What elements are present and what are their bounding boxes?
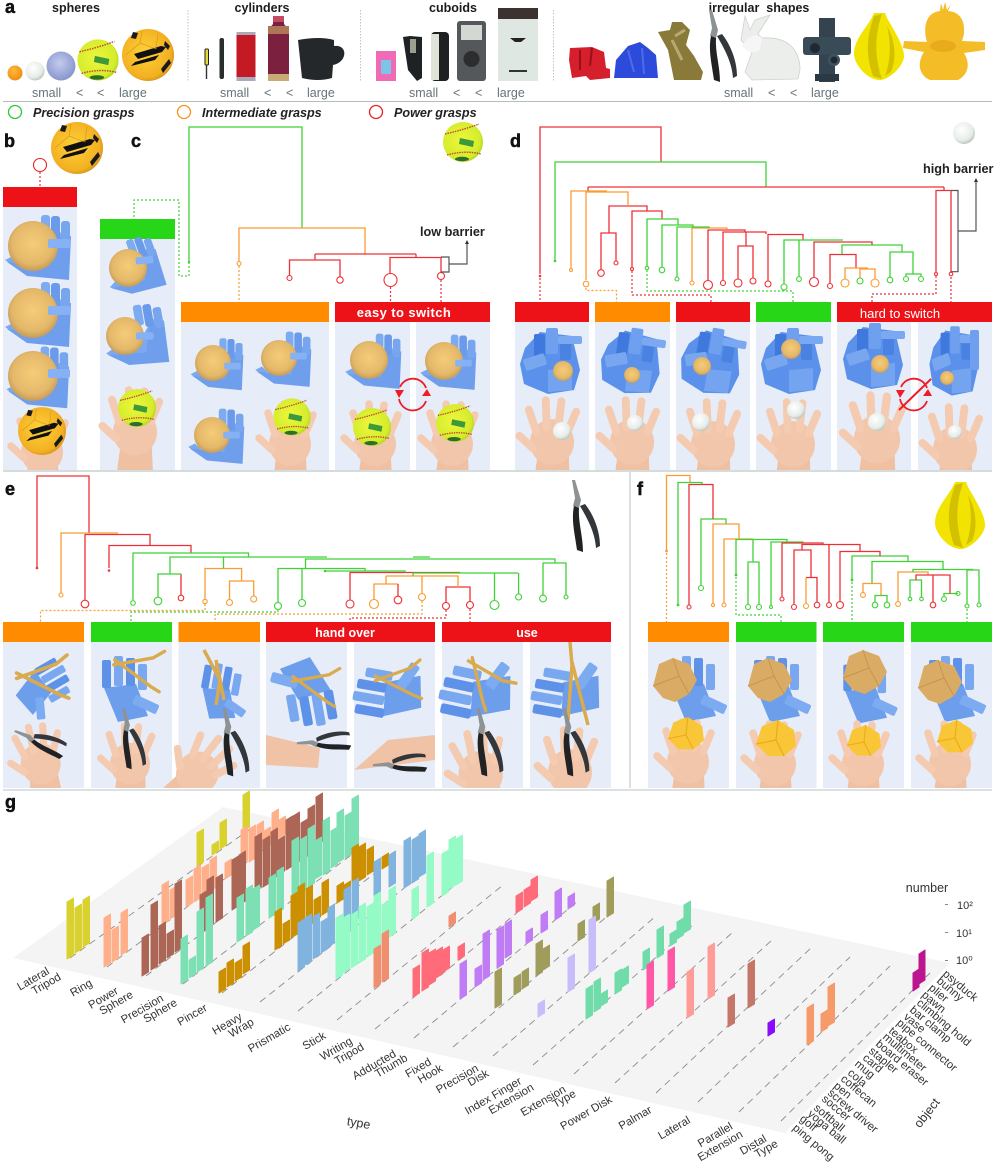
panel letter b: b [4, 131, 15, 151]
bars: Fixed Hook [495, 877, 614, 1008]
number axis: 10¹ [956, 928, 972, 940]
type axis labels: Extension [487, 1082, 536, 1117]
row guide lines [70, 829, 930, 1121]
size labels: large [811, 86, 839, 100]
header bar: green [100, 219, 175, 239]
object axis labels: pipe connector [894, 1017, 959, 1074]
type axis labels: Tripod [333, 1041, 366, 1068]
bars: Palmar [728, 960, 754, 1027]
type axis labels: Prismatic [246, 1021, 293, 1055]
header bars: hard to switch [860, 306, 940, 321]
icon: softball [443, 122, 483, 162]
heading: spheres: spheres [52, 1, 100, 15]
grasp images row [648, 642, 992, 788]
size labels: small [409, 86, 438, 100]
header bars [3, 622, 611, 642]
panel letter c: c [131, 131, 141, 151]
object axis labels: ping pong [790, 1122, 836, 1163]
dendrogram d [539, 127, 953, 302]
object axis labels: psyduck [940, 968, 980, 1004]
type axis labels: Disk [466, 1068, 491, 1089]
icon: blocked switch arrow [896, 379, 932, 410]
header bars [648, 622, 992, 642]
irregular shapes row [569, 2, 985, 82]
bars: Power Disk [687, 943, 714, 1018]
type axis labels: Index Finger [463, 1075, 524, 1117]
icon: yellow vase [935, 482, 985, 549]
type axis labels: Heavy [211, 1011, 245, 1038]
type axis labels [15, 965, 780, 1163]
size labels [32, 86, 839, 100]
header bar: easy to switch [335, 302, 490, 322]
high barrier callout: high barrier [923, 162, 994, 176]
object axis labels: bar clamp [907, 1004, 953, 1045]
size labels: < [790, 86, 797, 100]
type axis labels: Stick [301, 1030, 328, 1053]
number axis: 10⁰ [956, 955, 973, 967]
type axis labels: Type [753, 1138, 780, 1161]
type axis labels: Palmar [617, 1104, 654, 1133]
bars: Distal Type [913, 950, 925, 991]
object axis labels: stapler [866, 1045, 900, 1076]
object axis labels: climbing hold [914, 997, 973, 1049]
panel d: ping pong ball grasps [510, 122, 994, 470]
object axis labels: pen [831, 1080, 853, 1102]
bars: Power Sphere [142, 793, 322, 976]
grasp pair: easy to switch [335, 322, 490, 470]
size labels: < [453, 86, 460, 100]
dendrogram node [34, 158, 46, 187]
type axis labels: Precision [119, 992, 166, 1026]
panel letter g: g [5, 792, 16, 812]
panel f: vase grasps [637, 476, 992, 822]
cuboids row [376, 8, 538, 81]
bars: Precision Disk [538, 916, 596, 1017]
panel e: plier grasps [3, 475, 611, 788]
axis title: object: object [911, 1095, 943, 1130]
object axis labels: soccer [819, 1093, 853, 1124]
type axis labels: Power [87, 985, 121, 1012]
object axis labels: screw driver [825, 1087, 880, 1136]
low barrier callout [420, 225, 485, 272]
heading: irregular shapes: irregular shapes [709, 1, 809, 15]
legend: grasp classes: Intermediate grasps [202, 106, 322, 120]
object axis labels: golf [797, 1113, 819, 1135]
low barrier callout: low barrier [420, 225, 485, 239]
bars: Heavy Wrap [298, 830, 426, 971]
heading: cylinders: cylinders [235, 1, 289, 15]
size labels: large [119, 86, 147, 100]
dendrogram c [134, 127, 444, 302]
bars: Lateral [768, 1019, 774, 1036]
header bar: red [3, 187, 77, 207]
number axis [906, 881, 973, 967]
bars: Stick [374, 912, 456, 988]
axis title: type: type [346, 1114, 372, 1132]
object axis labels [790, 968, 980, 1163]
type axis labels: Distal [738, 1133, 769, 1158]
type axis labels: Writing [318, 1035, 355, 1063]
panel b: soccer ball grasps [3, 122, 103, 470]
dendrogram e [36, 476, 568, 622]
object axis labels: teabox [886, 1025, 920, 1056]
type axis labels: Ring [68, 977, 95, 999]
type axis labels: Pincer [176, 1002, 210, 1029]
object axis labels: cola [845, 1067, 869, 1090]
panel letter d: d [510, 131, 521, 151]
size labels: < [76, 86, 83, 100]
panel a: object set [5, 0, 985, 100]
icon: pliers [572, 480, 600, 552]
size labels: < [97, 86, 104, 100]
header bars: use [516, 626, 538, 640]
type axis labels: Adducted [351, 1048, 398, 1083]
size labels: small [724, 86, 753, 100]
grasp group: orange [181, 322, 329, 470]
type axis labels: Power Disk [559, 1094, 615, 1133]
type axis labels: Extension [519, 1084, 568, 1119]
icon: switch cycle arrow [395, 379, 431, 410]
object axis labels: multimeter [880, 1031, 929, 1075]
type axis labels: Tripod [30, 971, 63, 998]
cylinders row [205, 16, 344, 81]
legend: grasp classes: Precision grasps [33, 106, 134, 120]
size labels: < [768, 86, 775, 100]
bars: Index Finger Extension [586, 901, 690, 1019]
heading: cuboids: cuboids [429, 1, 477, 15]
type axis labels: Thumb [373, 1052, 410, 1080]
header bars [515, 302, 992, 322]
panel g: 3D bar chart [5, 791, 980, 1163]
bars: Writing Tripod [413, 876, 538, 997]
header bar: easy to switch: easy to switch [357, 305, 451, 320]
size labels: large [497, 86, 525, 100]
type axis labels: Type [551, 1088, 578, 1111]
icon: white ball [953, 122, 975, 144]
type axis labels: Fixed [403, 1056, 434, 1081]
size labels: small [32, 86, 61, 100]
grasp images column [3, 207, 77, 470]
grasp images row [515, 322, 992, 470]
object axis labels: yoga ball [805, 1108, 848, 1147]
object axis labels: card [860, 1052, 885, 1076]
size labels: < [475, 86, 482, 100]
object axis labels: pawn [919, 989, 948, 1016]
object axis labels: vase [901, 1011, 927, 1036]
bars: Precision Sphere [181, 795, 358, 984]
bars: Lateral Tripod [67, 791, 250, 959]
bars: Parallel Extension [807, 983, 834, 1045]
legend: grasp classes: Power grasps [394, 106, 477, 120]
dendrogram f [665, 476, 981, 622]
object axis labels: board eraser [873, 1038, 930, 1089]
chart floor [13, 807, 950, 1133]
bars: Prismatic [336, 835, 462, 979]
bars: Extension Type [647, 947, 674, 1009]
panel letter e: e [5, 479, 15, 499]
object axis labels: softball [811, 1102, 846, 1134]
grasp images row [3, 642, 611, 788]
header bar: orange [181, 302, 329, 322]
object axis labels: coffecan [838, 1073, 879, 1110]
type axis labels: Precision [434, 1062, 481, 1096]
object axis labels: plier [926, 982, 950, 1005]
bars: Adducted Thumb [460, 888, 574, 999]
size labels: < [286, 86, 293, 100]
spheres row [8, 29, 174, 81]
type axis labels: Hook [416, 1062, 445, 1086]
type axis labels: Sphere [98, 989, 135, 1018]
header bars: hand over [315, 626, 375, 640]
bars: Ring [104, 809, 286, 967]
panel letter f: f [637, 479, 644, 499]
type axis labels: Wrap [227, 1016, 256, 1040]
panel c: softball grasps [97, 122, 490, 502]
number axis: 10² [957, 900, 973, 912]
grasp column: green [98, 236, 175, 470]
type axis labels: Lateral [15, 965, 52, 993]
size labels: large [307, 86, 335, 100]
size labels: < [264, 86, 271, 100]
icon: soccer ball [51, 122, 103, 174]
high barrier callout [923, 162, 994, 272]
type axis labels: Parallel [696, 1121, 735, 1150]
object axis labels: bunny [934, 975, 966, 1004]
legend: grasp classes [8, 106, 477, 120]
size labels: small [220, 86, 249, 100]
object axis labels: mug [852, 1058, 877, 1082]
type axis labels: Lateral [656, 1114, 693, 1142]
bars: Pincer [219, 843, 388, 993]
number axis: number [906, 881, 948, 895]
type axis labels: Sphere [142, 997, 179, 1026]
